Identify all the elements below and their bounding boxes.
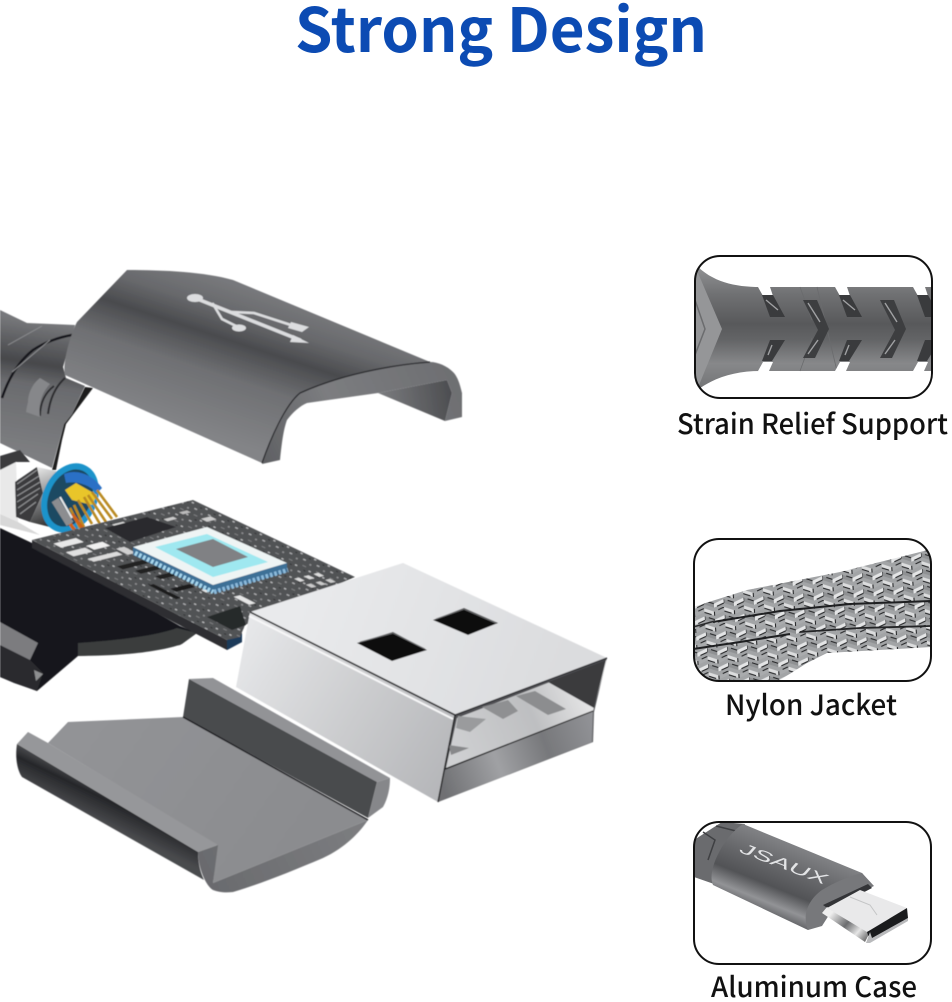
main processor [133,527,288,593]
connector rim [806,873,874,930]
small chip [105,517,176,542]
exploded USB connector illustration [0,270,607,892]
micro USB plug [822,907,870,942]
card border [694,539,931,681]
grey end piece at left [0,622,43,691]
gaps and fabric windows [758,287,829,371]
silver USB plug [236,563,607,802]
bottom aluminum shell [16,678,390,892]
lower chip [207,606,246,630]
label: Nylon Jacket [725,684,897,724]
circuit board [32,500,355,650]
wires and blue ring [0,450,117,538]
brand text on case: JSAUX [736,839,831,889]
PCB components [53,510,336,606]
black underside and fabric [0,528,197,691]
card border [694,822,931,964]
braided nylon cable image [693,549,932,682]
panel: nylon jacket [693,539,932,724]
strain relief and cable at left [0,310,93,470]
opening shadow [548,660,606,708]
micro USB connector image [694,822,908,943]
panel: strain relief support [677,256,948,443]
USB holes [357,632,427,661]
card border [695,256,932,398]
label: Strain Relief Support [677,403,948,443]
strain relief cable image [696,268,931,388]
top aluminum shell [64,270,462,464]
panel: aluminum case [694,822,931,1002]
USB symbol [187,294,309,343]
